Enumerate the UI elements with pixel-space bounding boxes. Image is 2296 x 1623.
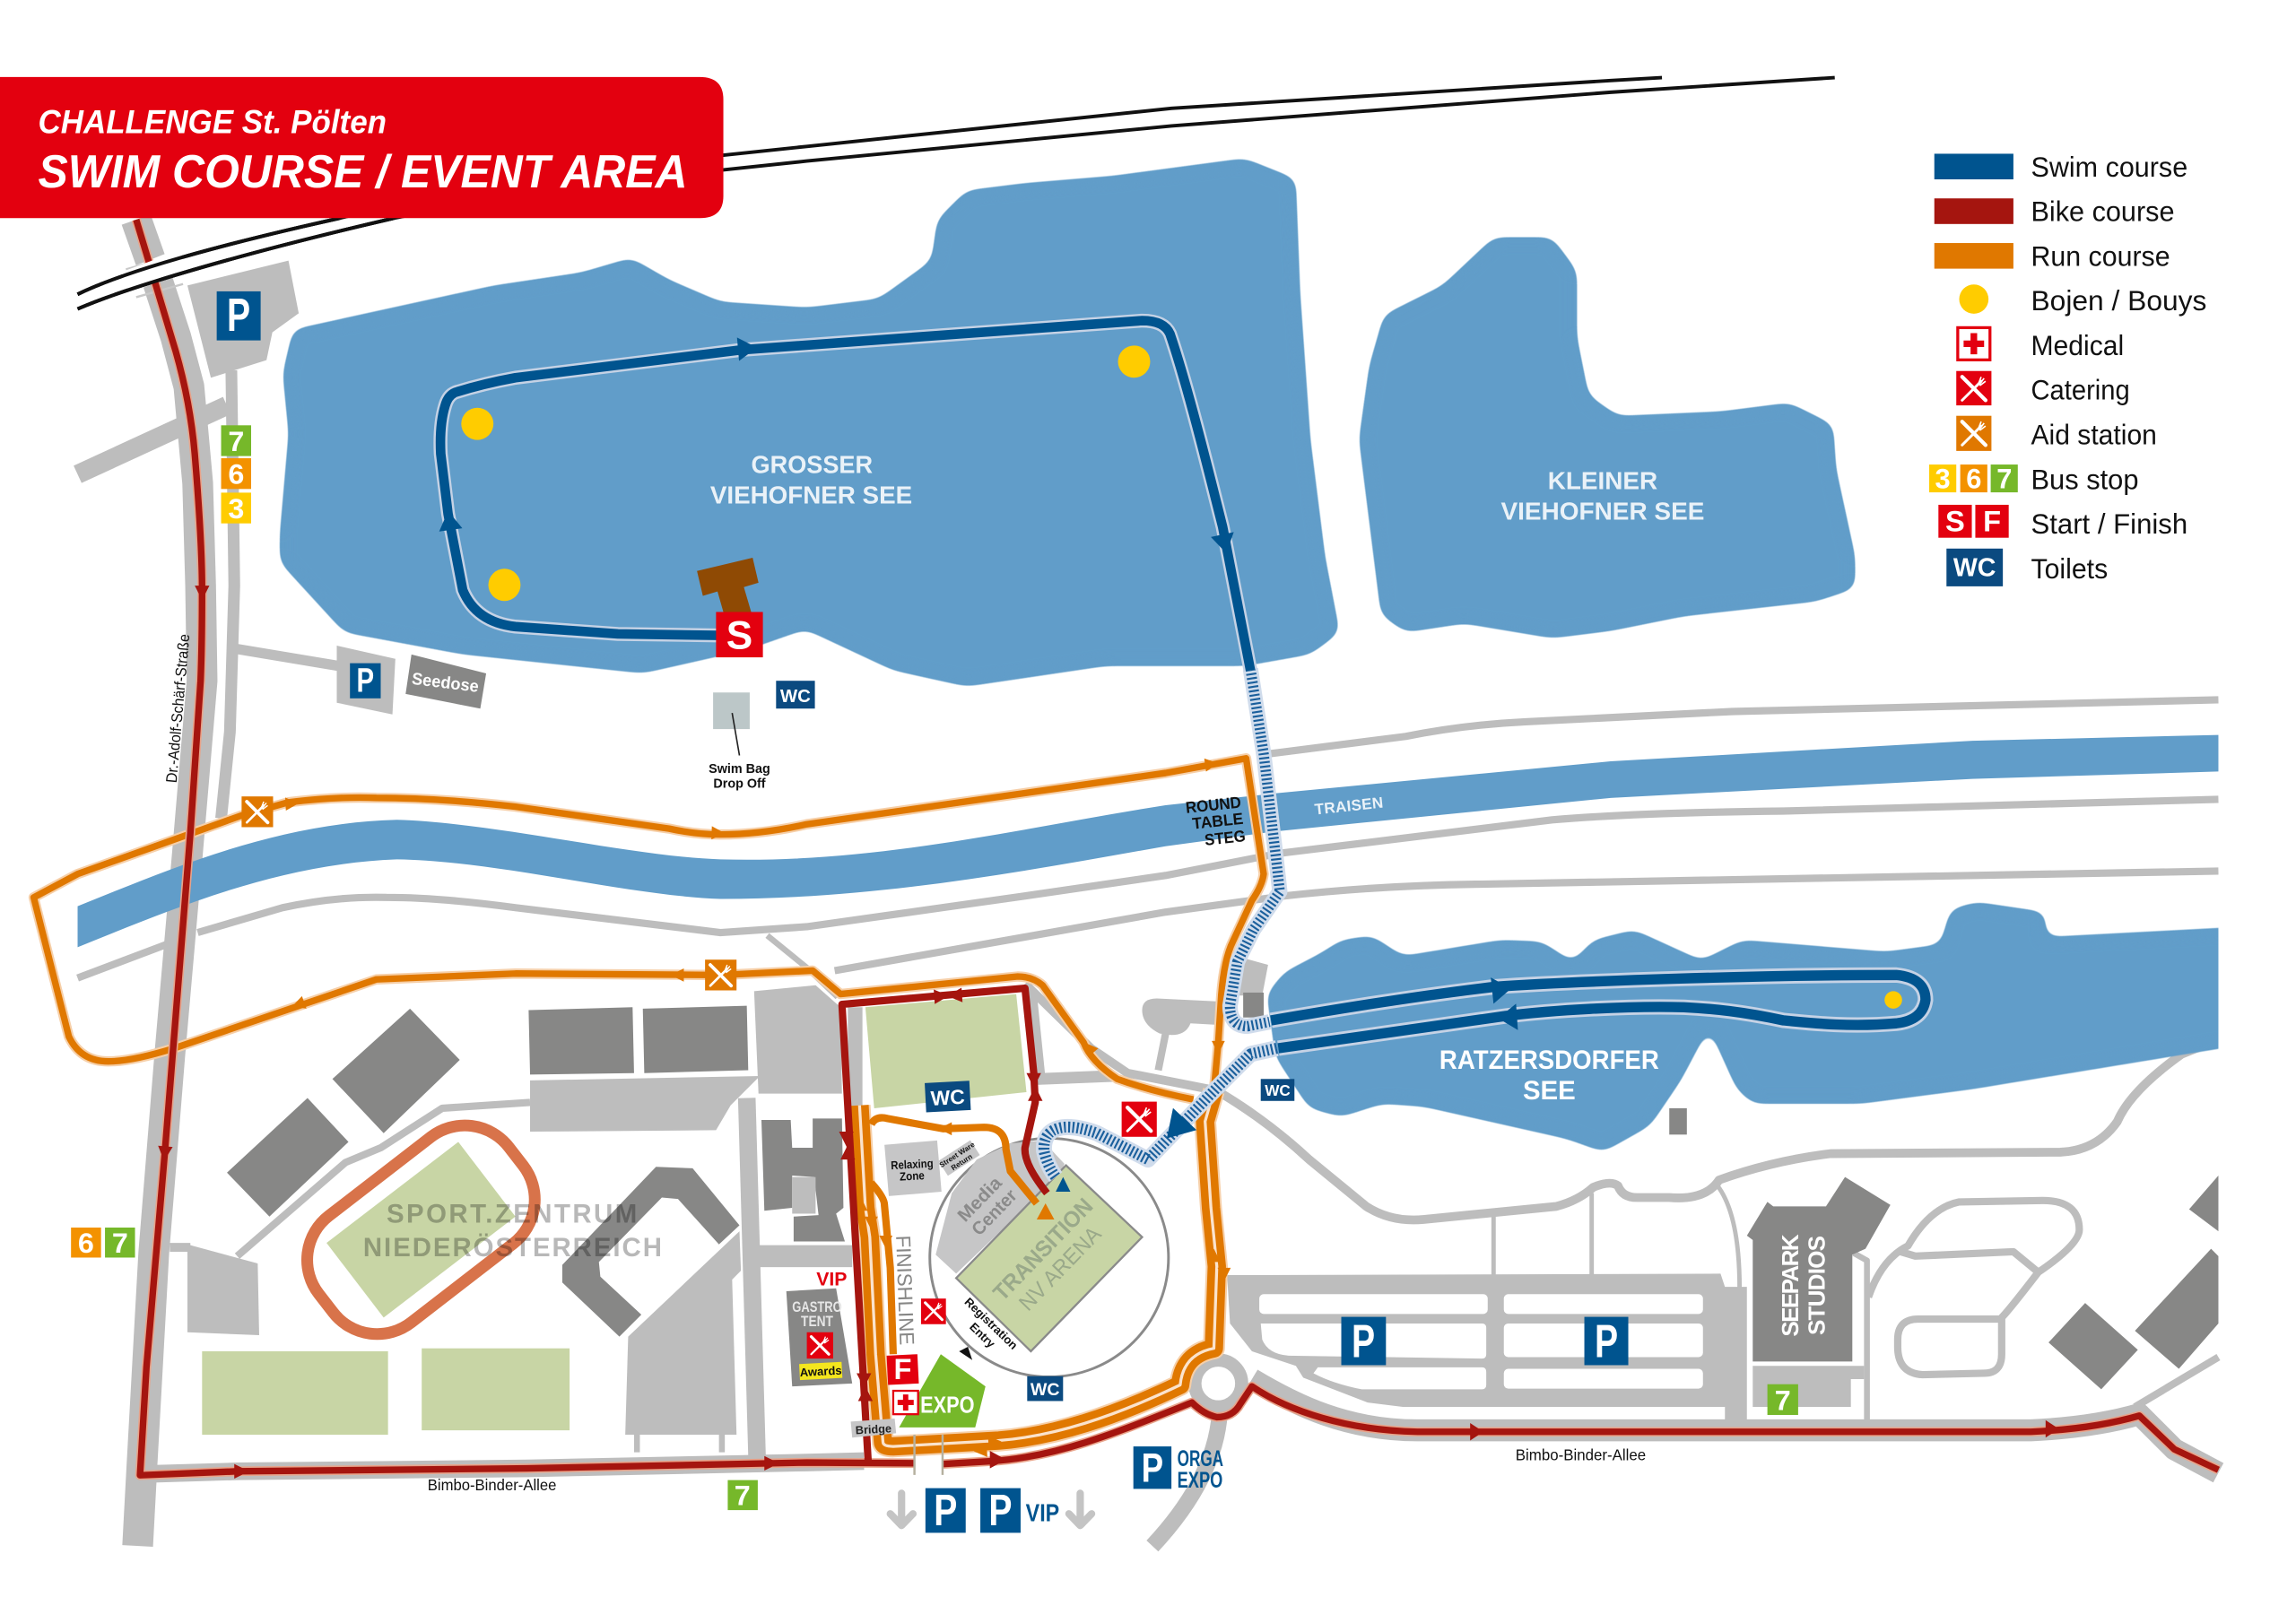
toilets by Grosser See (776, 681, 815, 708)
Seepark Studios (1747, 1177, 1891, 1407)
registration entry: Entry (967, 1320, 998, 1351)
expo tent (899, 1354, 986, 1428)
swim transition walkway: lake to lake (1230, 669, 1280, 1027)
legend (1929, 152, 2206, 586)
toilets by arena: WC (1031, 1380, 1060, 1400)
parking VIP: P (988, 1487, 1012, 1535)
parking sign Seedose: P (357, 661, 374, 699)
parking Orga Expo: ORGA (1178, 1446, 1223, 1471)
river Traisen (78, 735, 2218, 947)
bridge label: Round Table Steg (1185, 794, 1247, 849)
bridge tag: Bridge (855, 1421, 891, 1436)
swim bag drop off: Drop Off (713, 777, 766, 791)
parking signs east: P (1595, 1315, 1618, 1367)
legend: buoys: Bojen / Bouys (2031, 285, 2206, 317)
legend: toilets (1946, 549, 2108, 586)
street ware return (937, 1140, 981, 1176)
bus stops north (222, 425, 251, 525)
arena (930, 1138, 1169, 1377)
sport centre light buildings (187, 985, 842, 1435)
parking signs east: P (1352, 1315, 1375, 1367)
title banner: CHALLENGE St. Pölten (38, 103, 387, 141)
start marker S (716, 612, 763, 657)
bus stop Seepark (1768, 1384, 1798, 1416)
label: Sport.Zentrum Niederösterreich: SPORT.ZENTRUM (387, 1199, 637, 1228)
street ware return: Return (950, 1152, 974, 1172)
railway (78, 78, 1835, 309)
legend: swim course (1935, 152, 2187, 183)
arena: Center (969, 1186, 1022, 1240)
legend: toilets: WC (1953, 553, 1996, 582)
legend: aid station (1956, 416, 2157, 451)
car park top left (187, 261, 299, 378)
legend: buoys (1959, 284, 2206, 317)
legend: bus stop: 7 (1996, 464, 2012, 495)
bus stop Seepark: 7 (1775, 1384, 1791, 1416)
parking sign top left: P (227, 290, 250, 342)
title banner (0, 77, 724, 218)
arena: TRANSITION (988, 1193, 1098, 1306)
catering icon at finish line (921, 1298, 946, 1324)
lake: Ratzersdorfer See (1266, 902, 2240, 1152)
lake labels: Ratzersdorfer See: RATZERSDORFER (1439, 1046, 1659, 1075)
bus stops west: 6 (78, 1228, 94, 1259)
legend: toilets: Toilets (2031, 553, 2108, 585)
bridge label: Round Table Steg: STEG (1204, 827, 1247, 849)
parking VIP: VIP (1026, 1498, 1059, 1526)
expo tent: EXPO (920, 1392, 975, 1419)
bridge label: Round Table Steg: ROUND (1185, 794, 1242, 817)
buildings on the right edge (2048, 1176, 2218, 1389)
lake: Kleiner Viehofner See (1359, 238, 1856, 638)
parking Orga Expo: P (1142, 1445, 1163, 1490)
run course arrows (285, 757, 1231, 1458)
toilets by sports field (925, 1081, 970, 1112)
lake labels: Kleiner Viehofner See: KLEINER (1548, 466, 1657, 494)
street ware return: Street Ware (938, 1141, 977, 1169)
legend: bus stop (1929, 464, 2138, 495)
bus stops north: 7 (228, 426, 244, 457)
start marker S: S (726, 613, 752, 657)
legend: bus stop: Bus stop (2031, 464, 2138, 495)
legend: catering (1956, 371, 2130, 406)
label: Sport.Zentrum Niederösterreich: NIEDERÖSTERREICH (363, 1233, 662, 1263)
arena: Media (954, 1173, 1006, 1226)
lake labels: Kleiner Viehofner See (1500, 466, 1704, 525)
swim start pontoon (697, 558, 759, 612)
sport centre buildings (227, 1006, 845, 1337)
bridge tag (851, 1419, 896, 1437)
registration entry: Registration (962, 1295, 1021, 1352)
legend: bike course: Bike course (2031, 196, 2174, 228)
street label: Bimbo-Binder-Allee east: Bimbo-Binder-Allee (1516, 1446, 1646, 1464)
bus stop south (727, 1480, 758, 1511)
road network (78, 220, 2218, 1546)
gastro tent: TENT (801, 1314, 833, 1330)
legend: run course (1935, 240, 2170, 272)
toilets by sports field: WC (930, 1085, 965, 1110)
bus stop south: 7 (735, 1480, 751, 1511)
legend: medical (1958, 327, 2124, 361)
bike course arrows (157, 586, 2059, 1479)
bus stops west: 7 (112, 1228, 128, 1259)
lake labels: Ratzersdorfer See (1439, 1046, 1659, 1106)
lake: Grosser Viehofner See (280, 158, 1340, 687)
aid station south (705, 959, 736, 991)
parking Orga Expo (1134, 1445, 1223, 1493)
river label: Traisen: TRAISEN (1314, 794, 1384, 818)
Seepark Studios: SEEPARK (1777, 1234, 1804, 1337)
parking Orga Expo: EXPO (1178, 1468, 1222, 1493)
sports fields (202, 994, 1026, 1435)
legend: aid station: Aid station (2031, 420, 2157, 451)
relaxing zone: Zone (900, 1168, 925, 1184)
swim transition walkway: lake to arena (1044, 1048, 1277, 1177)
gastro tent: Awards (799, 1364, 842, 1379)
legend: bus stop: 6 (1966, 464, 1981, 495)
toilets by arena (1027, 1376, 1063, 1401)
street label: Dr-Adolf-Schärf-Straße: Dr.-Adolf-Schärf-Straße (162, 633, 193, 784)
street label: Bimbo-Binder-Allee west: Bimbo-Binder-Allee (428, 1476, 556, 1494)
legend: start and finish: S (1945, 505, 1965, 538)
label: Sport.Zentrum Niederösterreich (363, 1199, 662, 1263)
map right edge mask (2218, 879, 2296, 1141)
Seepark Studios: STUDIOS (1803, 1236, 1830, 1335)
parking south: P (934, 1487, 957, 1535)
parking signs east (1342, 1315, 1629, 1367)
aid station west (241, 796, 273, 827)
gastro tent (787, 1289, 852, 1386)
catering icon near arena (1122, 1102, 1157, 1137)
bus stops north: 3 (228, 493, 244, 525)
toilets by Ratzersdorfer See: WC (1265, 1081, 1291, 1099)
bus stops west (71, 1228, 135, 1259)
railway crossing over bike course (78, 218, 394, 309)
stadium track and pitch (285, 1103, 557, 1357)
legend: catering: Catering (2031, 375, 2130, 406)
legend: start and finish (1938, 505, 2187, 540)
VIP label: VIP (816, 1269, 847, 1289)
parking VIP (980, 1487, 1059, 1535)
legend: swim course: Swim course (2031, 152, 2187, 183)
gate posts (915, 1435, 943, 1475)
lake labels: Ratzersdorfer See: SEE (1523, 1076, 1576, 1106)
building: Seedose (405, 655, 486, 708)
railway bridge across the main road (78, 218, 394, 309)
lake labels: Kleiner Viehofner See: VIEHOFNER SEE (1500, 498, 1704, 525)
toilets by Grosser See: WC (780, 687, 811, 707)
car park Seedose (337, 646, 396, 715)
swim bag drop off (709, 692, 770, 791)
legend: run course: Run course (2031, 240, 2170, 272)
arrow to parking left (891, 1493, 913, 1525)
relaxing zone (884, 1141, 942, 1196)
run course (34, 759, 1264, 1446)
legend: bike course (1935, 196, 2174, 228)
bike course (136, 220, 2218, 1475)
FINISHLINE label: FINISHLINE (891, 1235, 918, 1346)
building: Seedose: Seedose (411, 669, 480, 696)
lake labels: Grosser Viehofner See (710, 450, 912, 509)
gastro tent: GASTRO (792, 1299, 842, 1315)
parking area (1227, 1273, 1747, 1421)
toilets by Ratzersdorfer See (1261, 1079, 1294, 1101)
arrow to parking right (1069, 1493, 1091, 1525)
title banner: SWIM COURSE / EVENT AREA (38, 146, 688, 198)
buoys (461, 345, 1902, 1009)
bus stops north: 6 (228, 459, 244, 490)
legend: bus stop: 3 (1935, 464, 1951, 495)
relaxing zone: Relaxing (891, 1157, 934, 1172)
finish marker F (887, 1352, 918, 1385)
lake labels: Grosser Viehofner See: VIEHOFNER SEE (710, 482, 912, 509)
legend: start and finish: Start / Finish (2031, 508, 2187, 540)
swim course arrows (437, 336, 1518, 1192)
roundabout (1195, 1360, 1241, 1407)
medical marker at expo (893, 1391, 918, 1414)
lake labels: Grosser Viehofner See: GROSSER (752, 450, 873, 478)
gray blob by small lake (1142, 956, 1268, 1035)
legend: start and finish: F (1983, 505, 2001, 538)
finish marker F: F (894, 1352, 912, 1385)
swim bag drop off: Swim Bag (709, 762, 770, 777)
legend: medical: Medical (2031, 330, 2124, 361)
arena: NV ARENA (1014, 1222, 1107, 1315)
swim course: Ratzersdorfer See (1271, 975, 1926, 1048)
small building by lake (1243, 993, 1687, 1134)
bridge label: Round Table Steg: TABLE (1191, 810, 1244, 833)
swim course: Grosser See (440, 321, 1250, 671)
